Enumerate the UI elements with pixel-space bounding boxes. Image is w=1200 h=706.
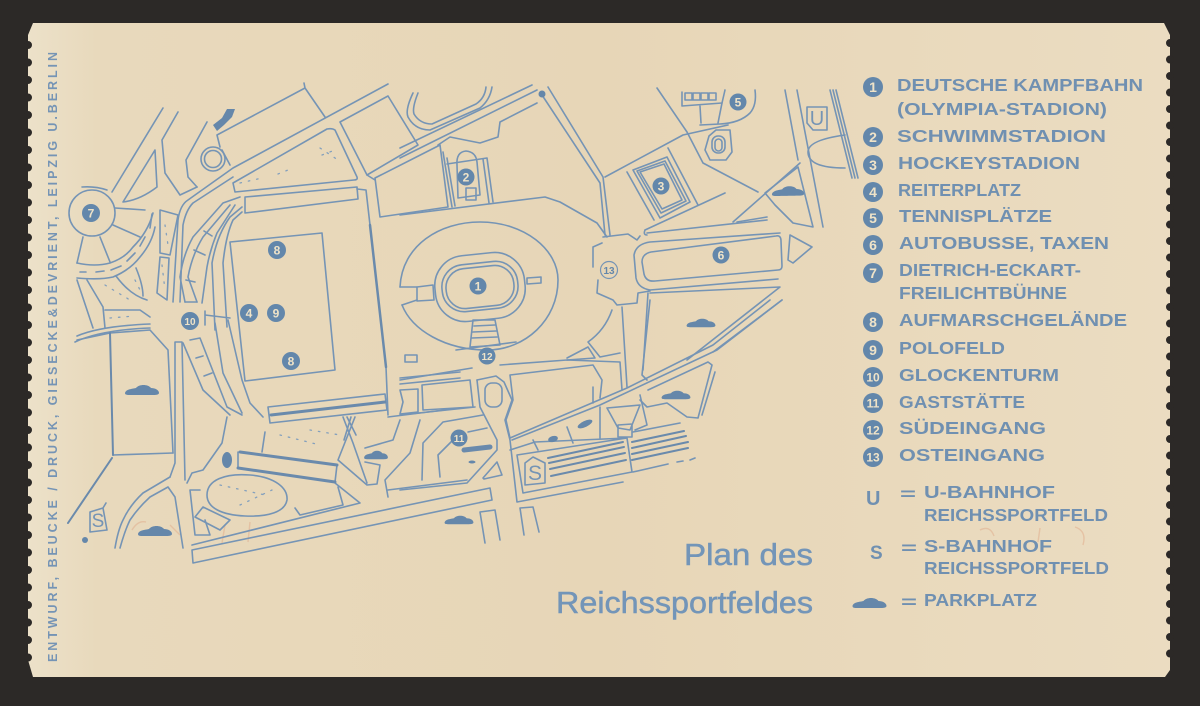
legend: place names: GLOCKENTURM — [899, 365, 1059, 385]
map: numbered badges: 5 — [735, 96, 742, 110]
map: numbered badges: 8 — [274, 244, 281, 258]
map: U-Bahn station area — [733, 90, 858, 263]
legend: place names: OSTEINGANG — [899, 445, 1045, 465]
legend: place names: HOCKEYSTADION — [898, 153, 1080, 173]
legend: numbered circles: 2 — [869, 129, 877, 145]
legend: place names: AUTOBUSSE, TAXEN — [899, 233, 1109, 253]
legend: place names: (OLYMPIA-STADION) — [897, 99, 1107, 119]
map: numbered badges: 3 — [658, 180, 665, 194]
site map — [68, 83, 858, 563]
map: east plaza and bus park — [542, 87, 782, 370]
map: bold bars and track lines — [68, 225, 688, 523]
legend — [852, 75, 1143, 612]
legend: transit and parking key: S-BAHNHOF — [924, 536, 1052, 556]
legend: place names: REITERPLATZ — [898, 180, 1021, 200]
legend: numbered circles: 13 — [866, 450, 880, 464]
legend: place names: DEUTSCHE KAMPFBAHN — [897, 75, 1143, 95]
title: Reichssportfeldes — [556, 585, 813, 620]
map: ring and north-west roads — [173, 83, 537, 415]
legend: place names — [897, 75, 1143, 465]
map: numbered badges — [82, 94, 746, 446]
legend: place names: SCHWIMMSTADION — [897, 126, 1106, 146]
map: hockey stadium — [605, 125, 767, 235]
map: tennis courts — [657, 88, 758, 192]
legend: place names: POLOFELD — [899, 338, 1005, 358]
legend: place names: GASTSTÄTTE — [899, 392, 1025, 412]
map: station letters: S — [92, 511, 104, 532]
legend: transit and parking key: = — [901, 538, 917, 558]
map: small blue markers — [82, 90, 594, 543]
legend: numbered circles: 3 — [869, 157, 877, 173]
map: numbered badges: 11 — [454, 434, 465, 445]
map: numbered badges: 9 — [273, 306, 280, 320]
map: numbered badges: 4 — [246, 306, 253, 320]
legend: place names: DIETRICH-ECKART- — [899, 260, 1081, 280]
title — [556, 537, 813, 620]
legend: numbered circles: 1 — [869, 79, 877, 95]
map: station letters: U — [810, 108, 824, 130]
legend: transit and parking key: PARKPLATZ — [924, 590, 1037, 610]
map: swimming stadium — [443, 151, 493, 207]
legend: transit and parking key: REICHSSPORTFELD — [924, 505, 1108, 525]
map: Dietrich-Eckart amphitheatre — [69, 108, 207, 342]
title: Plan des — [684, 537, 813, 572]
map: numbered badges: 2 — [463, 170, 470, 184]
legend: transit and parking key: = — [900, 484, 916, 504]
map: numbered badges: 1 — [475, 280, 482, 294]
map: numbered badges: 7 — [88, 206, 95, 220]
legend: numbered circles: 4 — [869, 184, 877, 200]
map: numbered badges: 12 — [481, 352, 493, 363]
legend: place names: SÜDEINGANG — [899, 418, 1046, 438]
map: numbered badges: 8 — [288, 354, 295, 368]
map: numbered badges: 10 — [184, 317, 196, 328]
legend: transit and parking key: = — [901, 592, 917, 612]
legend: numbered circles: 8 — [869, 314, 877, 330]
legend: numbered circles — [863, 77, 883, 467]
legend: transit and parking key: REICHSSPORTFELD — [924, 558, 1109, 578]
map: numbered badges: 13 — [603, 266, 615, 277]
legend: numbered circles: 5 — [869, 210, 877, 226]
printer credit (vertical text): ENTWURF, BEUCKE / DRUCK, GIESECKE&DEVRIENT, LEIPZIG U.BERLIN — [46, 52, 60, 662]
map: garden dots — [105, 148, 340, 505]
map: Olympic stadium bowl — [400, 197, 607, 362]
map: numbered badges: 6 — [718, 248, 725, 262]
map: Reiterplatz south-west area — [77, 330, 492, 563]
legend: transit and parking key: U — [866, 488, 880, 510]
legend: numbered circles: 9 — [869, 342, 877, 358]
map: station letters — [92, 108, 824, 532]
map: south gate roads and S-Bahn — [388, 300, 782, 543]
legend: place names: FREILICHTBÜHNE — [899, 283, 1067, 303]
legend: place names: TENNISPLÄTZE — [899, 206, 1052, 226]
legend: transit and parking key: U-BAHNHOF — [924, 482, 1055, 502]
legend: numbered circles: 10 — [866, 370, 880, 384]
legend: numbered circles: 12 — [866, 424, 880, 438]
map: tower grandstand arcs — [180, 197, 263, 417]
map: parking car icons — [125, 186, 804, 536]
legend: numbered circles: 7 — [869, 265, 877, 281]
map: station letters: S — [528, 462, 542, 485]
legend: transit and parking key — [852, 482, 1109, 612]
legend: numbered circles: 6 — [869, 237, 877, 253]
legend: place names: AUFMARSCHGELÄNDE — [899, 310, 1127, 330]
legend: transit and parking key: S — [870, 543, 883, 564]
legend: numbered circles: 11 — [867, 396, 880, 410]
